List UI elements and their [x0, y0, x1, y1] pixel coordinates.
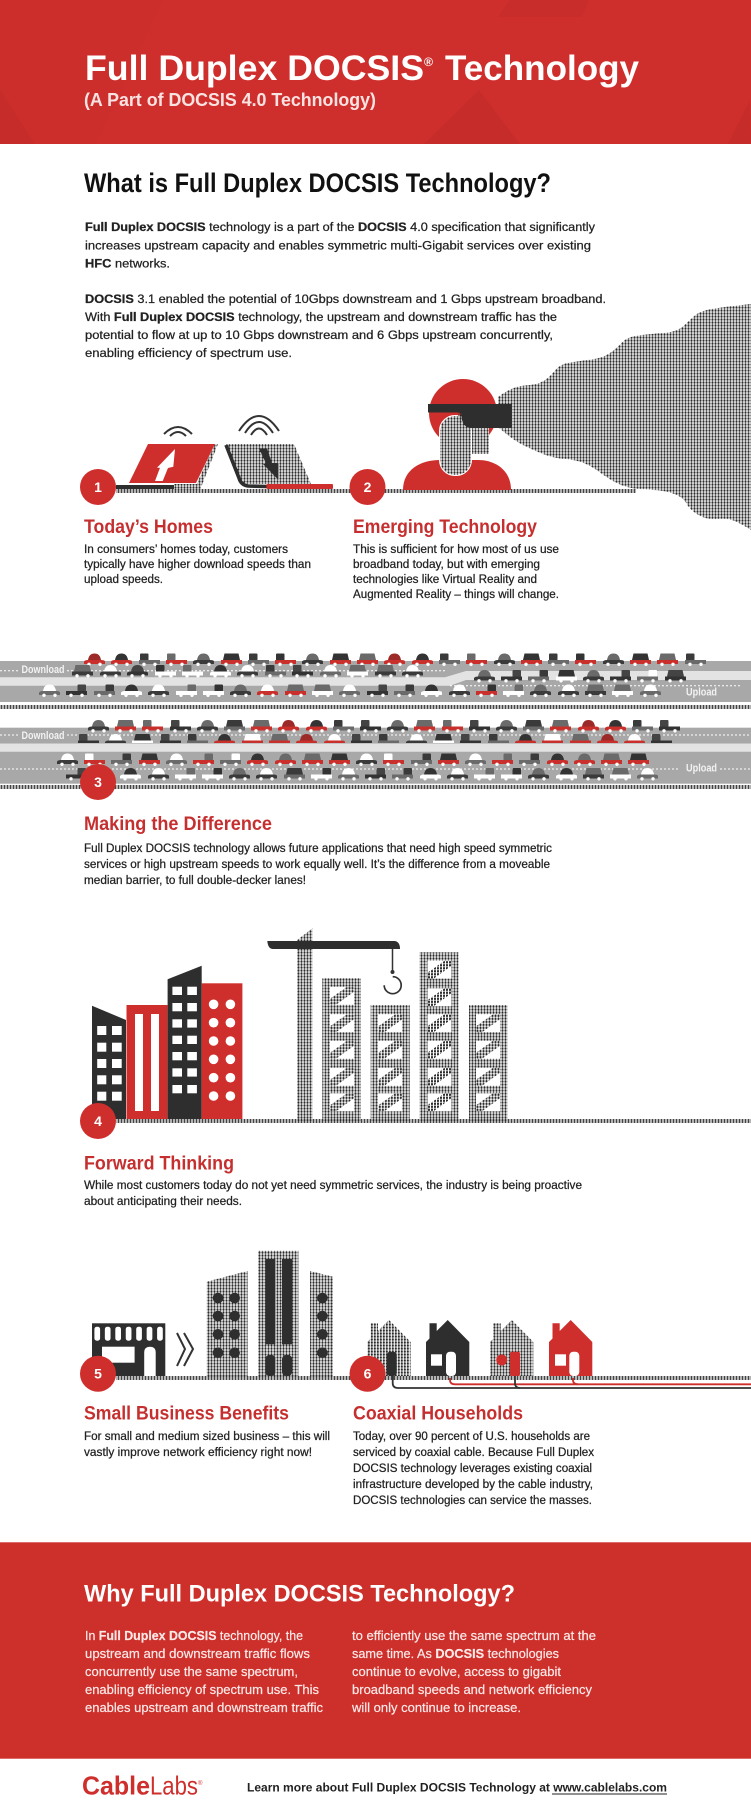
- text column left: enables upstream and downstream traffic: [85, 1701, 323, 1715]
- label: download: Download: [22, 664, 64, 676]
- section: coaxial households: [353, 1402, 594, 1507]
- section: emerging technology: Emerging Technology: [353, 516, 537, 538]
- illustration: finished buildings: [92, 966, 242, 1119]
- section: emerging technology: This is sufficient for how most of us use: [353, 542, 559, 556]
- main title: Technology: [445, 49, 640, 88]
- logo: CableLabs: [82, 1770, 203, 1800]
- section: making the difference: [84, 813, 552, 887]
- footer call to action: Learn more about Full Duplex DOCSIS Technology at www.cablelabs.com: [247, 1780, 667, 1794]
- badge 5: [80, 1356, 116, 1392]
- section: emerging technology: technologies like Virtual Reality and: [353, 572, 537, 586]
- badge 3: 3: [94, 774, 102, 790]
- section: forward thinking: [84, 1152, 582, 1208]
- icon: person with VR headset: [403, 379, 512, 490]
- road: double-decker lanes: [0, 720, 751, 789]
- text column right: same time. As DOCSIS technologies: [352, 1647, 559, 1661]
- badge 1: 1: [94, 479, 102, 495]
- main title: ®: [424, 55, 433, 69]
- badge 3: [80, 764, 116, 800]
- ground line: section 4: [116, 1119, 751, 1123]
- icon: download laptop: [226, 416, 333, 489]
- road: moveable median: [0, 654, 751, 709]
- section: emerging technology: [353, 516, 559, 601]
- heading: what is full duplex: What is Full Duplex DOCSIS Technology?: [84, 168, 551, 198]
- badge 2: [350, 469, 386, 505]
- section: coaxial households: Coaxial Households: [353, 1402, 523, 1424]
- label: upload: Upload: [686, 686, 717, 698]
- intro paragraphs: With Full Duplex DOCSIS technology, the upstream and downstream traffic has the: [85, 310, 557, 324]
- label: upload: Upload: [686, 763, 717, 775]
- badge 4: [80, 1103, 116, 1139]
- text column left: In Full Duplex DOCSIS technology, the: [85, 1629, 303, 1643]
- text column right: continue to evolve, access to gigabit: [352, 1665, 562, 1679]
- section: today's homes: Today’s Homes: [84, 516, 213, 538]
- section: forward thinking: While most customers today do not yet need symmetric services, the industry is being proactive: [84, 1178, 582, 1192]
- section: forward thinking: about anticipating their needs.: [84, 1194, 242, 1208]
- intro paragraphs: potential to flow at up to 10 Gbps downstream and 6 Gbps upstream concurrently,: [85, 328, 553, 342]
- badge 4: 4: [94, 1113, 102, 1129]
- header banner: [0, 0, 751, 144]
- illustration: office buildings: [206, 1251, 333, 1377]
- section: small business benefits: For small and medium sized business – this will: [84, 1429, 330, 1443]
- intro paragraphs: Full Duplex DOCSIS technology is a part of the DOCSIS 4.0 specification that significantly: [85, 220, 596, 234]
- section: making the difference: services or high upstream speeds to work equally well. It’s the difference from a moveable: [84, 857, 550, 871]
- section: emerging technology: broadband today, but with emerging: [353, 557, 540, 571]
- traffic: [57, 720, 680, 780]
- logo: CableLabs: ®: [198, 1780, 203, 1787]
- ground line: sections 5 and 6: [116, 1376, 751, 1380]
- intro paragraphs: enabling efficiency of spectrum use.: [85, 346, 292, 360]
- text column left: [85, 1629, 323, 1715]
- main title: [85, 49, 640, 88]
- icon: upload laptop: [116, 427, 218, 490]
- text column right: will only continue to increase.: [351, 1701, 521, 1715]
- text column left: enabling efficiency of spectrum use. This: [85, 1683, 319, 1697]
- intro paragraphs: HFC networks.: [85, 256, 170, 270]
- section: coaxial households: DOCSIS technology leverages existing coaxial: [353, 1461, 592, 1475]
- section: coaxial households: serviced by coaxial cable. Because Full Duplex: [353, 1445, 594, 1459]
- section: today's homes: typically have higher download speeds than: [84, 557, 311, 571]
- heading: why full duplex: Why Full Duplex DOCSIS Technology?: [84, 1580, 515, 1608]
- intro paragraphs: increases upstream capacity and enables symmetric multi-Gigabit services over existing: [85, 238, 591, 252]
- subtitle: (A Part of DOCSIS 4.0 Technology): [84, 89, 376, 110]
- text column right: [351, 1629, 596, 1715]
- logo: CableLabs: Cable: [82, 1770, 150, 1800]
- intro paragraphs: [85, 220, 606, 360]
- logo: CableLabs: Labs: [150, 1770, 198, 1800]
- illustration: data cloud from headset: [498, 304, 751, 530]
- section: forward thinking: Forward Thinking: [84, 1152, 234, 1174]
- badge 6: 6: [364, 1366, 372, 1382]
- icon: houses: [367, 1320, 592, 1376]
- panel: why full duplex: [0, 1542, 751, 1759]
- section: today's homes: upload speeds.: [84, 572, 163, 586]
- section: making the difference: median barrier, to full double-decker lanes!: [84, 873, 306, 887]
- badge 2: 2: [364, 479, 372, 495]
- illustration: buildings under construction: [322, 952, 508, 1121]
- ground line: sections 1 and 2: [116, 489, 636, 493]
- text column left: concurrently use the same spectrum,: [85, 1665, 298, 1679]
- traffic: [39, 654, 706, 697]
- section: coaxial households: DOCSIS technologies can service the masses.: [353, 1493, 592, 1507]
- text column right: to efficiently use the same spectrum at the: [352, 1629, 596, 1643]
- section: coaxial households: infrastructure developed by the cable industry,: [353, 1477, 593, 1491]
- section: today's homes: In consumers’ homes today, customers: [84, 542, 288, 556]
- text column left: upstream and downstream traffic flows: [85, 1647, 310, 1661]
- main title: Full Duplex DOCSIS: [85, 49, 424, 88]
- icon: crane: [267, 928, 401, 1121]
- intro paragraphs: DOCSIS 3.1 enabled the potential of 10Gbps downstream and 1 Gbps upstream broadband.: [85, 292, 606, 306]
- section: making the difference: Making the Difference: [84, 813, 272, 835]
- illustration: coaxial cables: [393, 1376, 751, 1388]
- icon: storefront: [92, 1323, 165, 1376]
- section: coaxial households: Today, over 90 percent of U.S. households are: [353, 1429, 590, 1443]
- arrow: chevrons to larger business: [177, 1333, 193, 1366]
- badge 1: [80, 469, 116, 505]
- badge 6: [350, 1356, 386, 1392]
- section: today's homes: [84, 516, 311, 586]
- section: small business benefits: [84, 1402, 330, 1459]
- section: small business benefits: Small Business Benefits: [84, 1402, 289, 1424]
- section: emerging technology: Augmented Reality – things will change.: [353, 587, 559, 601]
- section: small business benefits: vastly improve network efficiency right now!: [84, 1445, 312, 1459]
- badge 5: 5: [94, 1366, 102, 1382]
- label: download: Download: [22, 730, 64, 742]
- section: making the difference: Full Duplex DOCSIS technology allows future applications that need high speed symmetric: [84, 841, 552, 855]
- text column right: broadband speeds and network efficiency: [352, 1683, 593, 1697]
